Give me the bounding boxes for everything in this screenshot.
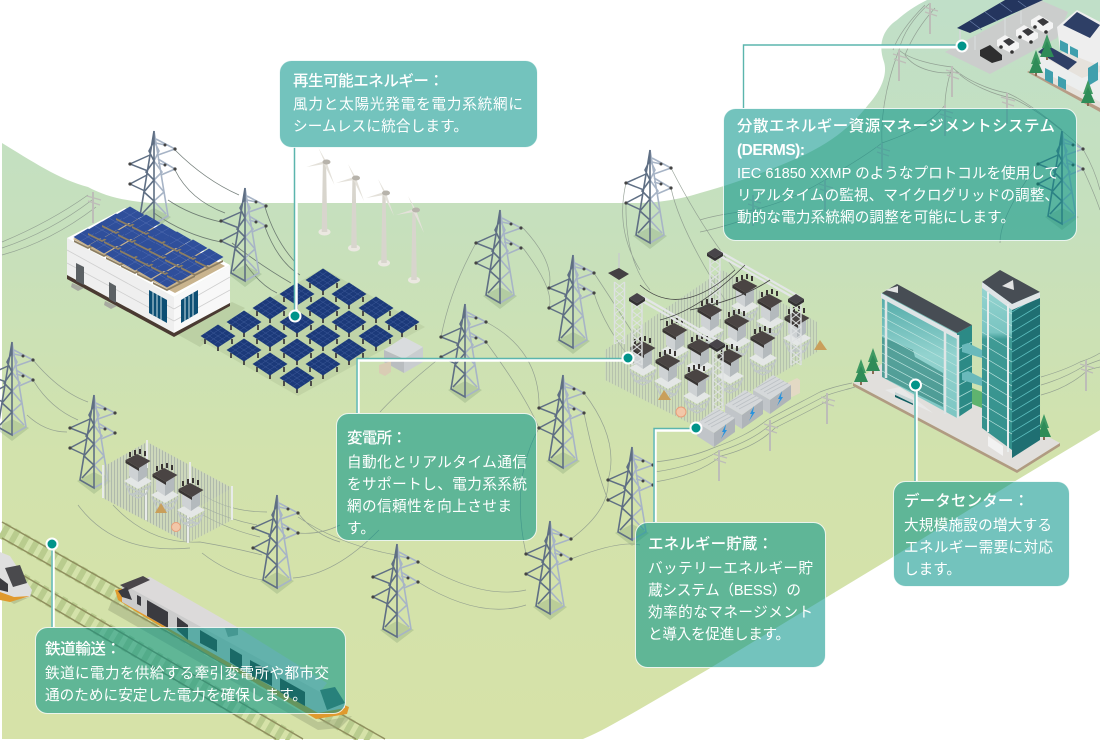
heading: energy storage: エネルギー貯蔵：	[648, 535, 773, 553]
connector: energy storage	[654, 422, 702, 522]
text: energy storage line 1: バッテリーエネルギー貯	[648, 560, 813, 577]
panel: energy storage	[636, 522, 826, 668]
text: energy storage line 2: 蔵システム（BESS）の	[648, 582, 801, 599]
solar panel array	[200, 268, 425, 396]
heading: data center: データセンター：	[904, 491, 1029, 510]
text: DERMS line 1: IEC 61850 XXMP のようなプロトコルを使用して	[737, 165, 1059, 182]
text: substation line 3: 網の信頼性を向上させま	[347, 498, 512, 515]
heading: substation: 変電所：	[347, 429, 407, 447]
text: DERMS line 3: 動的な電力系統網の調整を可能にします。	[737, 209, 1015, 226]
text: railway line 1: 鉄道に電力を供給する牽引変電所や都市交	[45, 665, 329, 682]
trains	[0, 552, 352, 730]
railway tracks	[2, 522, 385, 739]
heading: DERMS abbreviation: (DERMS):	[737, 142, 805, 159]
text: renewable energy line 1: 風力と太陽光発電を電力系統網に	[293, 96, 523, 113]
text: energy storage line 3: 効率的なマネージメント	[648, 604, 813, 621]
power poles	[87, 3, 1094, 481]
connector: renewable energy	[290, 147, 300, 322]
heading: DERMS: 分散エネルギー資源マネージメントシステム	[737, 117, 1055, 135]
text: energy storage line 4: と導入を促進します。	[648, 626, 790, 643]
panel: railway	[36, 628, 346, 714]
battery energy storage containers	[697, 375, 800, 447]
inverter unit	[379, 337, 423, 376]
transmission towers	[0, 131, 1085, 643]
text: substation line 4: す。	[347, 520, 375, 537]
text: renewable energy line 2: シームレスに統合します。	[293, 118, 468, 135]
text: data center line 2: エネルギー需要に対応	[904, 539, 1053, 556]
wind turbines	[306, 148, 424, 284]
houses	[1027, 10, 1100, 112]
EV charging station	[945, 0, 1068, 74]
solar factory building	[67, 206, 245, 347]
panel: renewable energy	[280, 60, 538, 148]
text: data center line 3: します。	[904, 561, 961, 578]
small substation	[103, 440, 232, 543]
connector: substation	[357, 352, 634, 413]
text: substation line 1: 自動化とリアルタイム通信	[347, 454, 527, 471]
connector: data center	[910, 380, 921, 481]
text: railway line 2: 通のために安定した電力を確保します。	[45, 687, 307, 704]
panel: substation	[336, 414, 536, 540]
text: substation line 2: をサポートし、電力系系統	[347, 476, 527, 493]
data center	[853, 270, 1060, 473]
heading: railway: 鉄道輸送：	[45, 640, 121, 658]
text: data center line 1: 大規模施設の増大する	[904, 517, 1052, 534]
heading: renewable energy: 再生可能エネルギー：	[293, 72, 444, 90]
connector: railway	[46, 538, 58, 627]
text: DERMS line 2: リアルタイムの監視、マイクログリッドの調整、	[737, 187, 1059, 204]
panel: data center	[894, 482, 1070, 586]
substation	[605, 248, 827, 425]
panel: DERMS	[724, 108, 1076, 240]
connector: DERMS	[744, 40, 968, 108]
